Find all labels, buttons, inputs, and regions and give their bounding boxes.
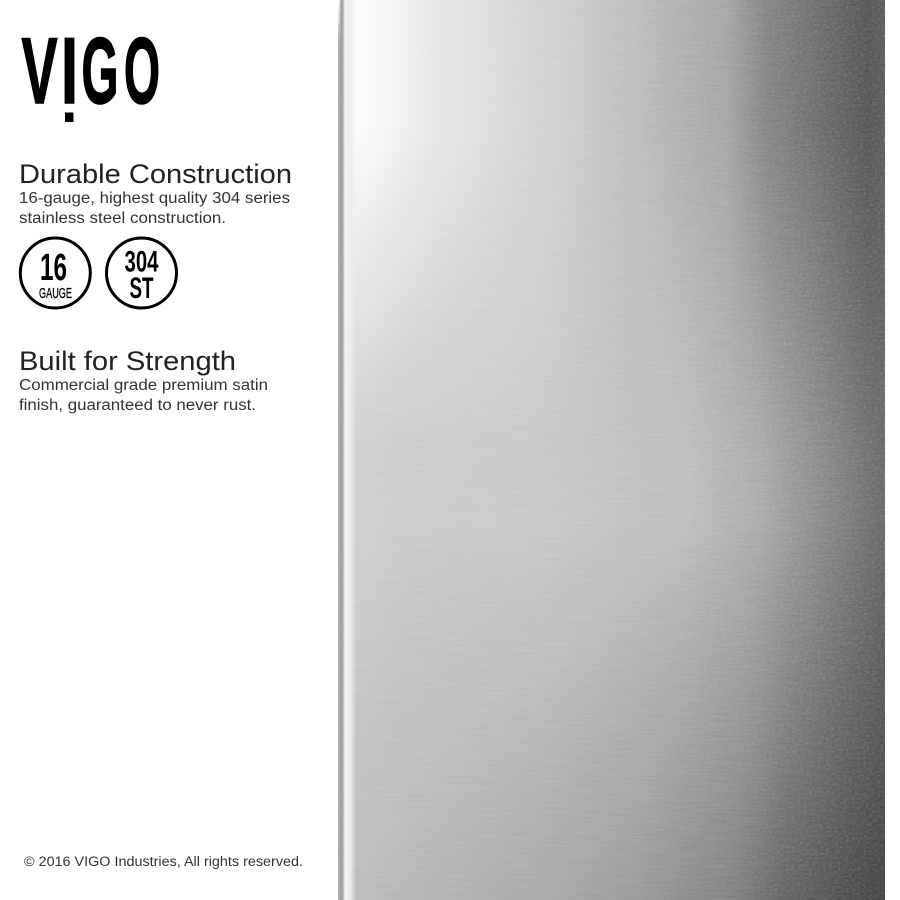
badge: 304 ST: 304 xyxy=(124,246,159,278)
text block: strength description: Commercial grade premium satin xyxy=(19,377,268,394)
badge: 16 gauge: 16 xyxy=(40,247,67,289)
text block: strength description: finish, guaranteed to never rust. xyxy=(19,397,256,414)
text block: strength description xyxy=(19,377,268,414)
text block: durable construction description xyxy=(19,190,290,227)
logo: VIGO xyxy=(22,18,160,123)
badge: 16 gauge: GAUGE xyxy=(39,285,72,302)
badge: 304 ST: ST xyxy=(130,272,154,305)
logo: VIGO: V xyxy=(22,18,58,123)
heading: Durable Construction: Durable Construction xyxy=(19,159,292,189)
panel: brushed stainless steel photo xyxy=(338,0,885,900)
heading: Built for Strength: Built for Strength xyxy=(19,346,236,376)
logo: VIGO: G xyxy=(82,18,118,123)
text and badges column xyxy=(18,18,303,869)
badge: 304 ST xyxy=(106,238,176,308)
text and badges column: O xyxy=(124,18,160,123)
text block: durable construction description: stainless steel construction. xyxy=(19,210,226,227)
badge: 16 gauge xyxy=(20,238,90,308)
logo: VIGO: I xyxy=(61,18,78,123)
copyright notice: © 2016 VIGO Industries, All rights reserved. xyxy=(24,854,303,869)
text block: durable construction description: 16-gauge, highest quality 304 series xyxy=(19,190,290,207)
